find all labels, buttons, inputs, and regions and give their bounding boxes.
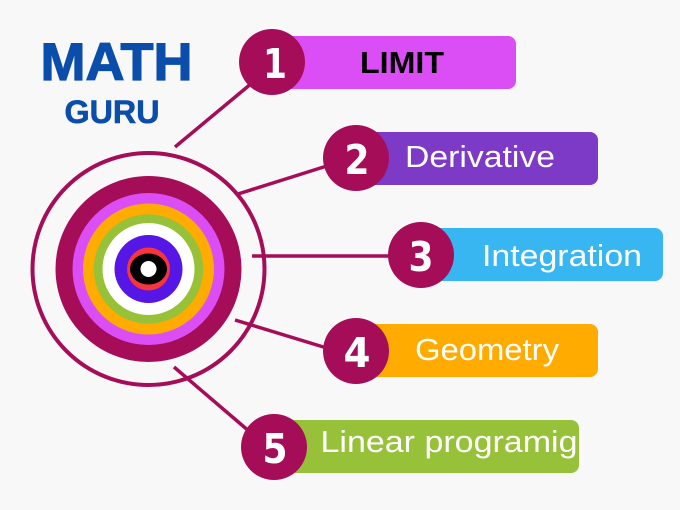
item 2: Derivative: 2 <box>344 136 370 184</box>
item 3: Integration: Integration <box>482 238 642 273</box>
heading: GURU: GURU <box>64 94 160 130</box>
item 1: LIMIT: 1 <box>263 40 287 88</box>
concentric target diagram <box>32 153 264 385</box>
item 5: Linear programig <box>241 414 579 480</box>
item 1: LIMIT: LIMIT <box>360 45 444 80</box>
item 5: Linear programig: Linear programig <box>320 424 578 459</box>
item 5: Linear programig: 5 <box>262 425 288 473</box>
item 1: LIMIT <box>239 29 516 95</box>
item 4: Geometry: 4 <box>344 329 370 377</box>
item 4: Geometry <box>323 318 598 384</box>
heading: MATH: MATH <box>40 33 192 92</box>
item 3: Integration <box>388 222 663 288</box>
item 3: Integration: 3 <box>408 233 434 281</box>
item 2: Derivative <box>323 125 598 191</box>
title <box>40 33 192 130</box>
item 2: Derivative: Derivative <box>405 139 555 174</box>
item 4: Geometry: Geometry <box>415 332 560 367</box>
connector lines <box>174 83 392 432</box>
